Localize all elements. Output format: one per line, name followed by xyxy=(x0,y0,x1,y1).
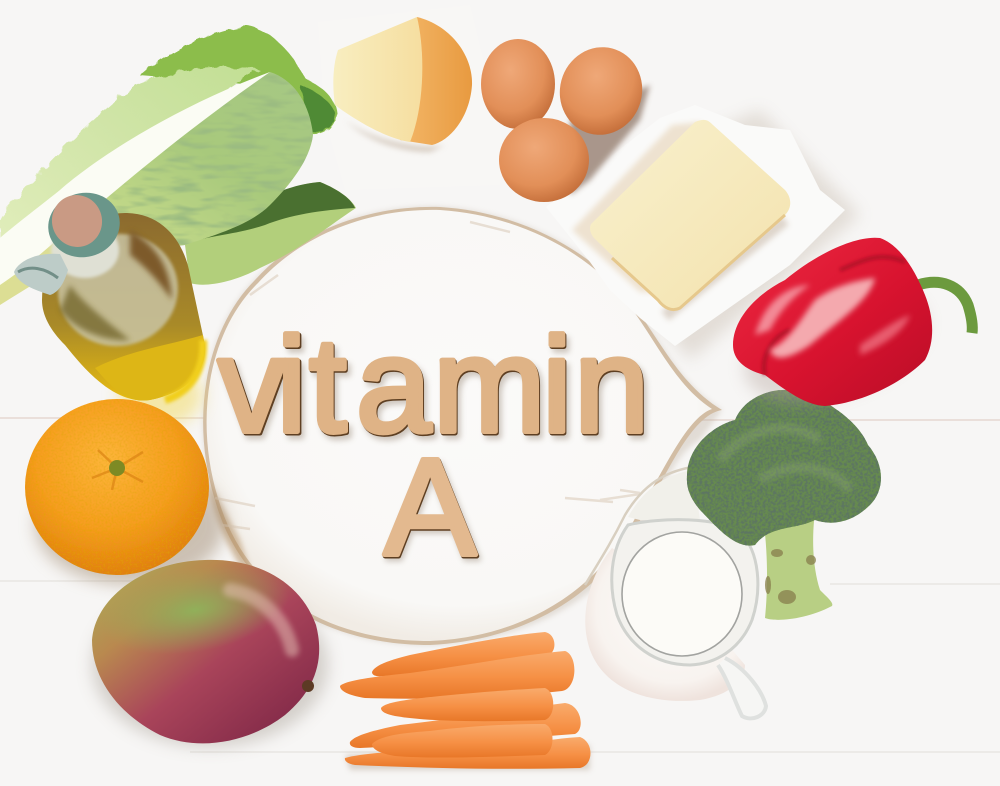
broccoli: florets xyxy=(687,390,881,546)
carrot 5 xyxy=(345,737,590,769)
title soft shadow: vitamin xyxy=(222,315,653,466)
lettuce: pale upper leaf xyxy=(0,67,260,290)
title: vitamin: vitamin xyxy=(218,310,649,460)
egg: right xyxy=(550,38,652,144)
milk: jug body xyxy=(585,548,745,701)
lettuce: lower leaf xyxy=(185,182,356,285)
carrots xyxy=(340,632,590,770)
wooden round board xyxy=(203,207,722,645)
butter on paper xyxy=(546,105,860,360)
carrot 4 xyxy=(381,688,553,721)
egg: shadow xyxy=(570,85,650,195)
orange: fruit xyxy=(25,399,209,575)
butter: shadow xyxy=(600,110,860,360)
pepper: stem xyxy=(918,282,972,333)
mango: fruit xyxy=(92,560,319,743)
olive oil bottle xyxy=(14,185,205,427)
pepper: body xyxy=(733,238,932,406)
egg: bottom xyxy=(499,118,589,202)
bottle: glass body xyxy=(42,213,205,400)
butter: parchment paper xyxy=(546,105,845,346)
cheese on paper xyxy=(318,5,505,190)
bottle: teal lip xyxy=(41,185,127,265)
milk jug on plate xyxy=(585,467,766,718)
pepper: highlights xyxy=(755,285,810,335)
orange: navel xyxy=(92,450,143,490)
broccoli xyxy=(687,390,881,620)
cheese: orange rind xyxy=(400,17,472,145)
lettuce xyxy=(0,26,356,305)
bottle: handle xyxy=(14,254,68,295)
egg: left xyxy=(481,39,555,129)
carrot 3 xyxy=(350,703,581,748)
mango xyxy=(92,552,328,747)
carrot 6 xyxy=(372,724,552,758)
milk: liquid xyxy=(622,532,742,656)
milk: glass jar xyxy=(612,520,758,665)
title: A: A xyxy=(384,430,476,584)
milk: plate rim xyxy=(585,467,693,585)
title dark edge: vitamin xyxy=(220,311,650,462)
eggs xyxy=(481,38,652,202)
bottle: neck xyxy=(51,222,119,278)
broccoli: stalk cut nodes xyxy=(765,549,816,604)
mango: stem spot xyxy=(302,680,314,692)
lettuce: green inner leaf xyxy=(70,72,313,246)
title soft shadow: A xyxy=(387,435,479,589)
lettuce: white rib xyxy=(0,72,270,288)
cheese: parchment paper xyxy=(318,5,505,190)
title: vitamin A wooden letters xyxy=(218,310,653,589)
bottle: cork xyxy=(46,189,108,253)
butter: block xyxy=(590,120,790,310)
title dark edge xyxy=(220,311,650,586)
milk: jar handle xyxy=(718,658,766,718)
title soft shadow xyxy=(222,315,653,589)
lettuce: pale stem end xyxy=(0,225,110,305)
cheese: pale face xyxy=(333,17,422,142)
bottle: shoulder reflection xyxy=(49,224,187,356)
red bell pepper xyxy=(729,238,972,424)
title dark edge: A xyxy=(385,432,477,586)
lettuce: top frilly leaf xyxy=(140,26,336,134)
broccoli: stalk xyxy=(763,512,832,620)
carrot 2 xyxy=(340,651,574,699)
orange xyxy=(25,399,225,585)
bottle: oil at base xyxy=(95,335,204,401)
carrot 1 xyxy=(372,632,554,676)
